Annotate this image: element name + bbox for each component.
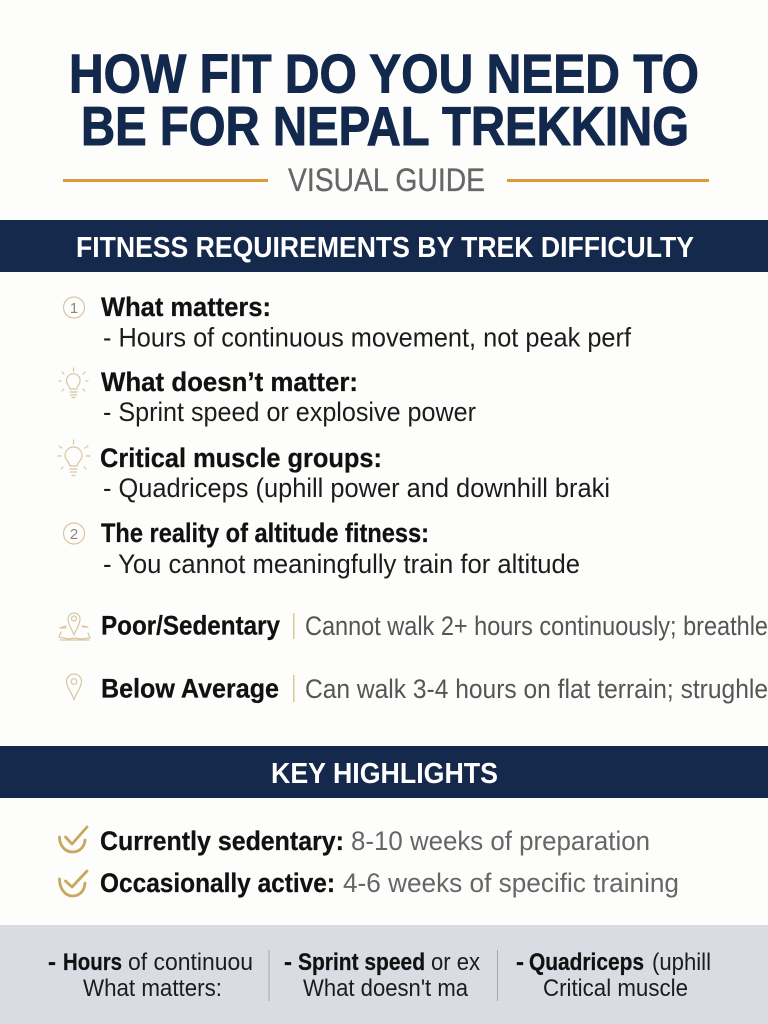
icon: number two: 2: [70, 526, 78, 543]
row: poor/sedentary: [59, 610, 768, 641]
item: reality of altitude fitness: - You cannot meaningfully train for altitude: [103, 549, 580, 579]
section header: fitness requirements: [0, 220, 768, 272]
row: below average: Below Average: [101, 674, 279, 704]
summary: what doesn't matter: or ex: [431, 949, 480, 976]
row: poor/sedentary: Poor/Sedentary: [101, 610, 280, 640]
title: [69, 42, 699, 157]
icon: map pin: [66, 674, 82, 700]
icon: number one: [64, 297, 84, 318]
icon: map pin on map: [59, 613, 90, 640]
item: reality of altitude fitness: [64, 518, 580, 579]
icon: light bulb: [59, 368, 88, 398]
highlight: occasionally active: Occasionally active:: [100, 868, 335, 898]
subtitle with gold rules: [63, 162, 709, 198]
highlight: occasionally active: 4-6 weeks of specific training: [343, 868, 679, 898]
icon: number two: [64, 523, 84, 544]
highlight: occasionally active: [60, 868, 679, 898]
item: what matters: What matters:: [101, 292, 271, 322]
highlight: currently sedentary: Currently sedentary:: [100, 826, 344, 856]
row: below average: [66, 674, 768, 704]
item: critical muscle groups: Critical muscle groups:: [100, 443, 382, 473]
summary: what matters: [48, 949, 253, 1002]
item: what matters: [64, 292, 631, 352]
summary: what doesn't matter: [284, 949, 480, 1002]
summary: what doesn't matter: -: [284, 949, 292, 976]
item: critical muscle groups: - Quadriceps (uphill power and downhill braki: [103, 473, 610, 503]
section header: key highlights: KEY HIGHLIGHTS: [271, 758, 498, 790]
icon: check mark: [60, 827, 87, 852]
title: BE FOR NEPAL TREKKING: [81, 95, 689, 157]
summary: what matters: What matters:: [83, 975, 222, 1002]
summary: critical muscle: (uphill: [652, 949, 711, 976]
item: what doesn't matter: - Sprint speed or explosive power: [103, 397, 476, 427]
highlight: currently sedentary: 8-10 weeks of preparation: [351, 826, 650, 856]
icon: check mark: [60, 871, 87, 896]
item: what doesn't matter: What doesn’t matter:: [101, 367, 358, 397]
summary band: [0, 925, 768, 1024]
summary: what doesn't matter: Sprint speed: [298, 949, 425, 976]
icon: light bulb glowing: [58, 440, 90, 476]
section header: fitness requirements: FITNESS REQUIREMENTS BY TREK DIFFICULTY: [76, 232, 694, 264]
item: what doesn't matter: [59, 367, 476, 427]
summary: what matters: -: [48, 949, 56, 976]
item: reality of altitude fitness: The reality of altitude fitness:: [101, 518, 429, 548]
summary: critical muscle: [516, 949, 711, 1002]
summary: critical muscle: Quadriceps: [529, 949, 644, 976]
item: what matters: - Hours of continuous movement, not peak perf: [103, 322, 631, 352]
summary: critical muscle: -: [516, 949, 524, 976]
summary: what matters: of continuou: [128, 949, 253, 976]
summary: what matters: Hours: [63, 949, 122, 976]
item: critical muscle groups: [58, 440, 610, 503]
summary: critical muscle: Critical muscle: [543, 975, 688, 1002]
highlight: currently sedentary: [60, 826, 650, 856]
subtitle with gold rules: VISUAL GUIDE: [288, 162, 485, 198]
section header: key highlights: [0, 746, 768, 798]
icon: number one: 1: [70, 300, 78, 317]
summary: what doesn't matter: What doesn't ma: [303, 975, 469, 1002]
